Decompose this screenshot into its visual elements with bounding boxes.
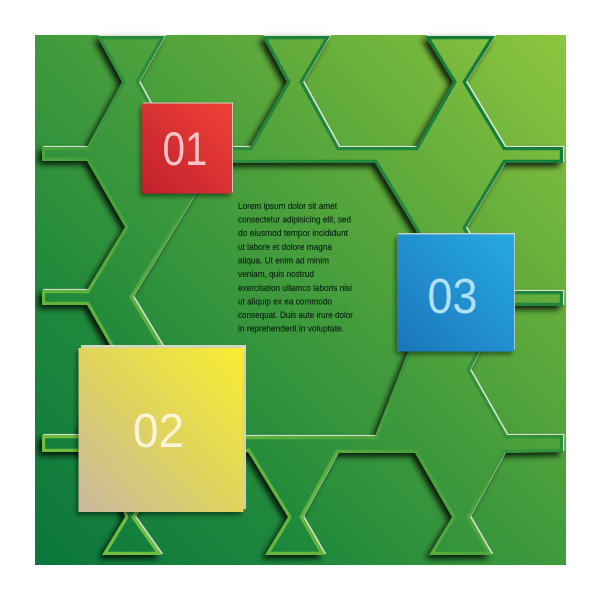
text block: lorem ipsum: do eiusmod tempor incididunt [238,227,348,238]
card 02: yellow square [78,345,246,512]
text block: lorem ipsum: aliqua. Ut enim ad minim [238,254,329,266]
text block: lorem ipsum: consectetur adipisicing elit, sed [238,214,351,224]
text block: lorem ipsum: ut labore et dolore magna [238,241,333,252]
text block: lorem ipsum: veniam, quis nostrud [238,268,314,279]
text block: lorem ipsum: in reprehenderit in voluptate. [238,322,344,334]
hexagon lattice network [38,35,564,558]
panel: green background [35,35,566,565]
text block: lorem ipsum [238,200,353,334]
number 02: 02 [133,405,184,458]
text block: lorem ipsum: Lorem ipsum dolor sit amet [238,200,337,211]
infographic [35,33,566,565]
number 03: 03 [428,270,478,324]
card 03: blue square [397,233,515,352]
text block: lorem ipsum: exercitation ullamco laboris nisi [238,282,352,293]
card 01: red square [142,102,233,194]
number 01: 01 [162,122,208,175]
text block: lorem ipsum: consequat. Duis aute irure dolor [238,309,353,320]
text block: lorem ipsum: ut aliquip ex ea commodo [238,296,332,306]
